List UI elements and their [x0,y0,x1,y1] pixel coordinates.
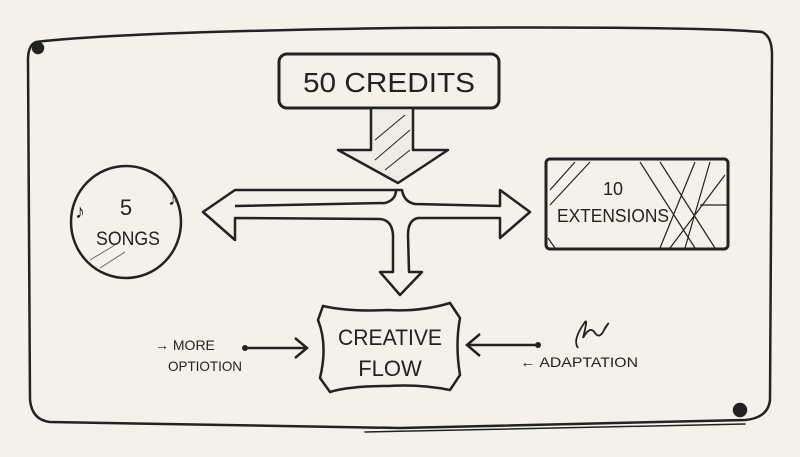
left input: → MORE [155,337,215,353]
circle: songs: ♪ [75,201,85,223]
left input: OPTIOTION [168,358,242,374]
extensions box [546,159,728,249]
circle: songs: ♪ [168,188,178,210]
credits box [279,54,499,108]
creative flow [318,303,460,392]
credits box: 50 CREDITS [303,67,475,98]
circle: songs [71,166,181,278]
cross arrow [203,190,530,295]
down arrow [338,108,448,183]
creative flow: CREATIVE [338,325,442,350]
circle: songs: 5 [120,195,132,220]
left input [155,337,307,374]
circle: songs: SONGS [96,229,160,250]
extensions box: 10 [603,179,623,199]
right input: ← ADAPTATION [520,354,638,370]
creative flow: FLOW [358,356,422,381]
extensions box: EXTENSIONS [557,206,669,226]
right input [467,321,638,370]
